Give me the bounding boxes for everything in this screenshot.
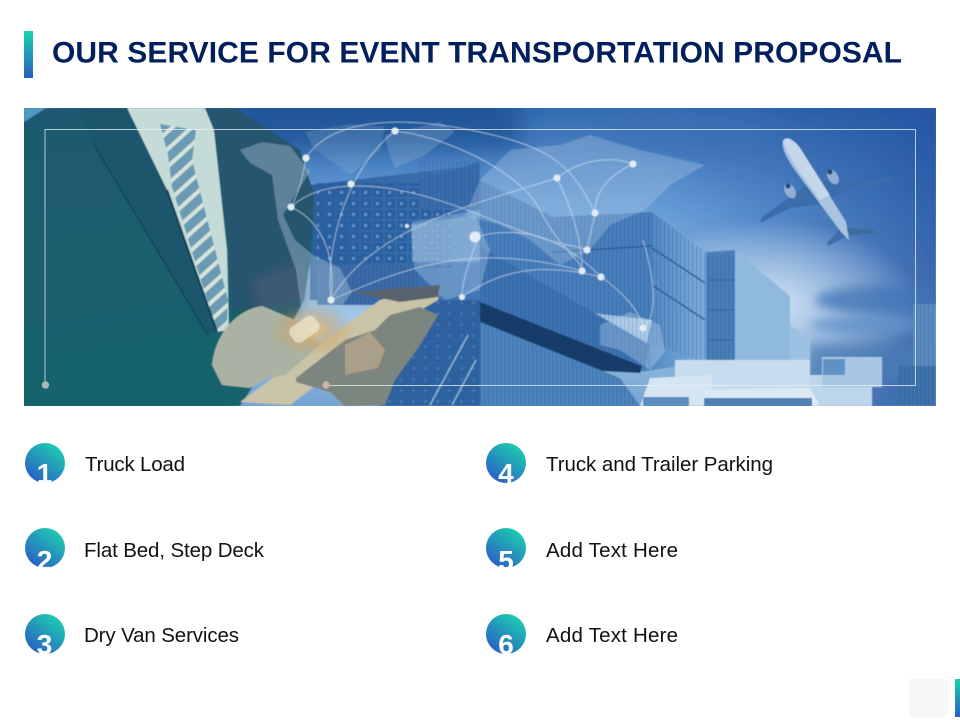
list item 1 — [25, 443, 185, 489]
trucks — [640, 357, 882, 406]
number badge 3: 3 — [37, 629, 52, 660]
list item 5 — [486, 528, 678, 576]
list item 6 — [486, 614, 678, 660]
title accent bar — [24, 31, 33, 78]
right side of jacket — [205, 108, 314, 312]
containers, centre and right stacks — [480, 180, 936, 406]
list item 3 — [25, 614, 239, 660]
number badge 4 — [486, 443, 526, 489]
number badge 1 — [25, 443, 65, 489]
decorative frame with end dots — [42, 130, 916, 389]
label 6: Add Text Here — [546, 624, 678, 647]
title: OUR SERVICE FOR EVENT TRANSPORTATION PROPOSAL — [52, 36, 902, 70]
network nodes — [288, 128, 646, 332]
footer accent bar — [955, 679, 960, 717]
number badge 6: 6 — [498, 629, 514, 660]
hands and tablet — [212, 285, 440, 406]
containers, left stack — [310, 162, 490, 406]
list item 4 — [486, 443, 773, 489]
number badge 2 — [25, 528, 65, 576]
list item 2 — [25, 528, 265, 576]
world map overlay — [240, 122, 705, 370]
number badge 6 — [486, 614, 526, 660]
label 2: Flat Bed, Step Deck — [84, 539, 265, 562]
necktie — [160, 124, 228, 332]
page number box — [909, 679, 948, 717]
network arcs — [291, 122, 653, 328]
number badge 5 — [486, 528, 526, 576]
label 5: Add Text Here — [546, 539, 678, 562]
number badge 1: 1 — [37, 458, 52, 489]
icon: airplane — [760, 138, 900, 246]
number badge 5: 5 — [498, 545, 514, 576]
label 4: Truck and Trailer Parking — [546, 453, 773, 476]
label 1: Truck Load — [85, 453, 185, 476]
shirt — [127, 108, 229, 332]
hanging container — [480, 247, 650, 406]
suit jacket — [14, 108, 314, 416]
businessman — [14, 108, 314, 416]
hero photo banner — [24, 108, 936, 406]
label 3: Dry Van Services — [84, 624, 239, 647]
number badge 2: 2 — [37, 545, 52, 576]
sky background — [24, 108, 936, 406]
jacket lapel — [126, 108, 216, 334]
number badge 3 — [25, 614, 65, 660]
number badge 4: 4 — [498, 458, 514, 489]
